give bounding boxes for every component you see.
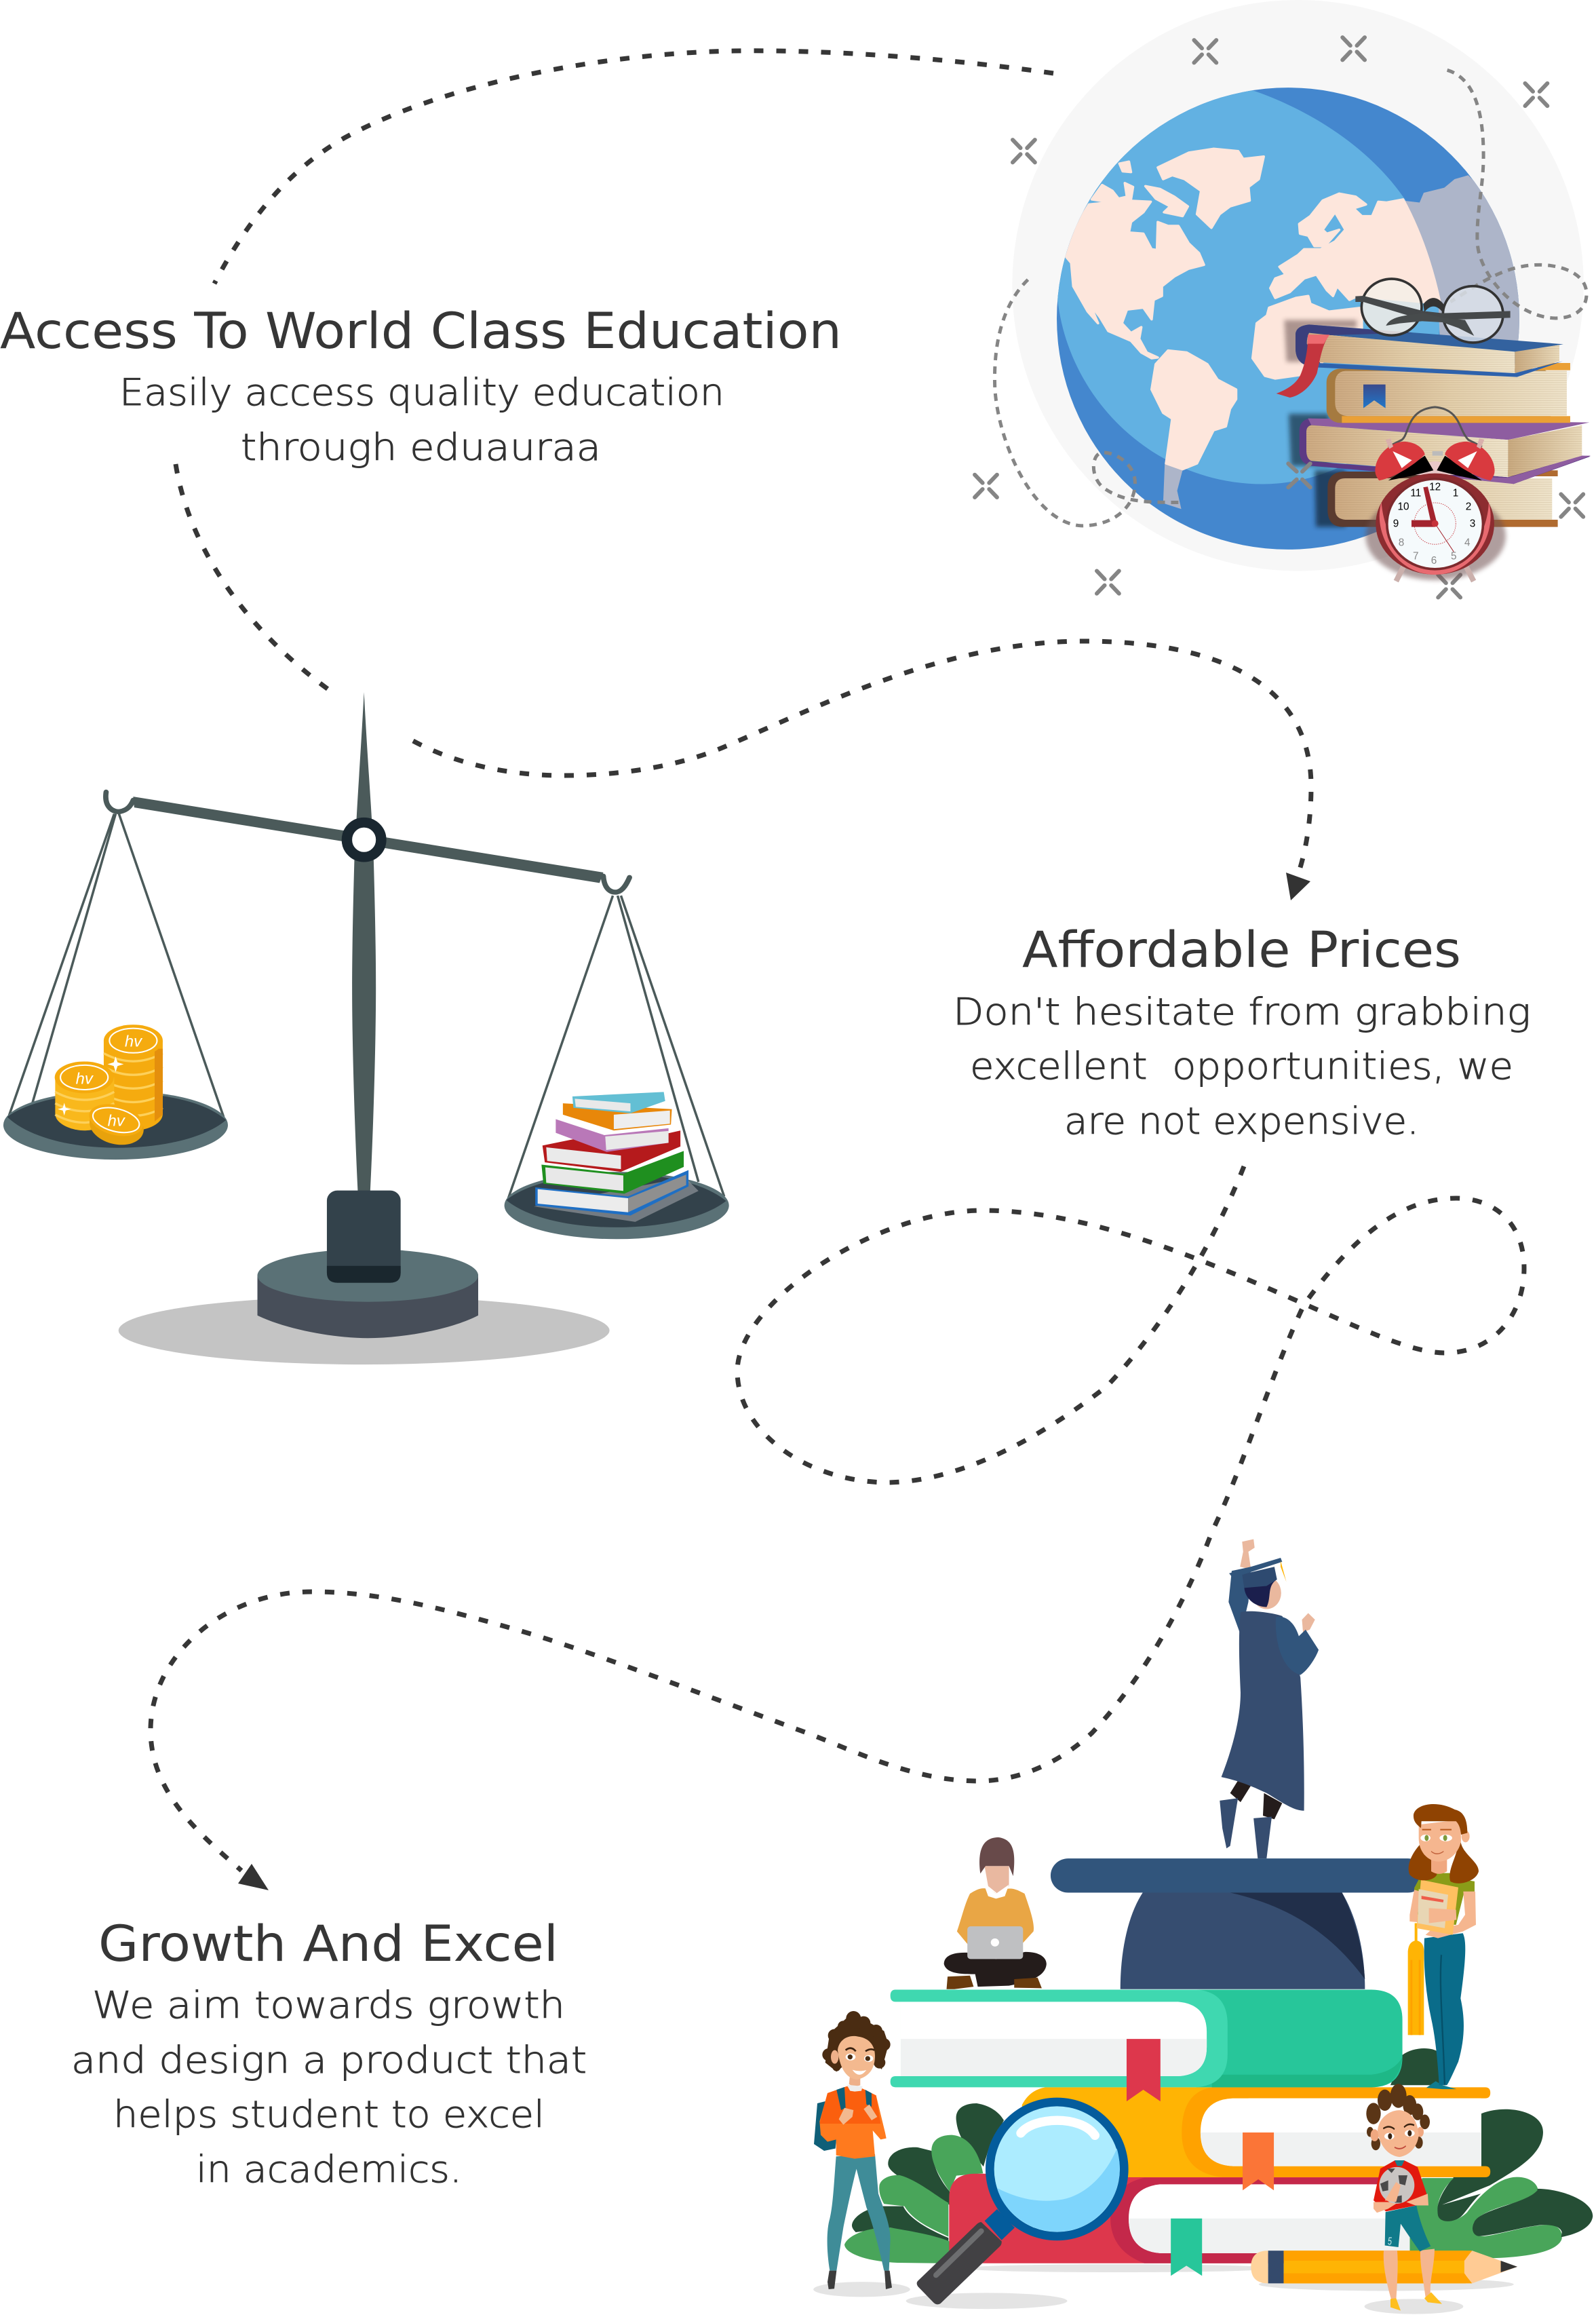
globe [1057, 88, 1519, 550]
pivot ring [347, 822, 381, 857]
heading: growth and excel: Growth And Excel [98, 1915, 558, 1973]
alarm clock: 7 [1413, 550, 1419, 562]
standing student with books and tassel [1408, 1804, 1479, 2089]
text block: growth and excel: We aim towards growth [92, 1984, 565, 2027]
heading: access: Access To World Class Education [0, 303, 842, 360]
base [258, 1249, 478, 1338]
text block: growth and excel [71, 1984, 587, 2191]
coins [55, 1025, 163, 1150]
left leaves [844, 2103, 1004, 2263]
small book stack [534, 1092, 699, 1222]
student with laptop [944, 1837, 1047, 1989]
book 2 [1327, 363, 1570, 423]
text block: affordable prices: excellent opportunities, we [970, 1045, 1513, 1088]
sparkle crosses [975, 37, 1583, 598]
text block: growth and excel: and design a product that [71, 2039, 587, 2082]
dashed route and arrow: infinity loop to growth and excel [151, 1166, 1524, 1890]
cross over books [1288, 463, 1310, 487]
student with soccer ball: 5 [1388, 2235, 1392, 2247]
student with backpack [814, 2011, 892, 2289]
right leaves [1390, 2048, 1593, 2258]
alarm clock: 6 [1431, 555, 1437, 567]
coins: hv [108, 1112, 125, 1129]
yellow book [1022, 2087, 1490, 2190]
dashed route and arrow: to affordable prices [413, 641, 1311, 900]
text block: affordable prices: Don't hesitate from grabbing [953, 991, 1531, 1033]
illustration: globe with dashed curves and crosses [975, 0, 1587, 598]
pencil [1251, 2251, 1517, 2283]
glasses [1355, 279, 1511, 343]
graduate student [1220, 1539, 1319, 1858]
student with soccer ball [1366, 2084, 1442, 2311]
left pan [3, 1090, 228, 1160]
beam [106, 792, 629, 892]
text block: growth and excel: helps student to excel [113, 2093, 545, 2136]
dashed route: to scale [176, 464, 331, 691]
illustration: book stack, glasses and alarm clock [1277, 279, 1591, 581]
strings [9, 814, 724, 1199]
text block: access: through eduauraa [241, 426, 601, 469]
post [352, 692, 376, 1192]
book 3 [1300, 418, 1591, 484]
post block [327, 1191, 401, 1283]
red book [949, 2174, 1409, 2276]
illustration: students on stacked books [813, 1539, 1593, 2314]
green book [891, 1990, 1403, 2101]
magnifying glass [917, 2098, 1129, 2304]
heading: affordable prices: Affordable Prices [1022, 921, 1461, 979]
coins: hv [76, 1070, 94, 1087]
dashed route: top arc [214, 51, 1053, 284]
alarm clock: 10 [1397, 501, 1409, 512]
alarm clock: 4 [1464, 537, 1471, 548]
alarm clock [1365, 407, 1506, 581]
book 1 with ribbon [1277, 324, 1563, 398]
text block: access [119, 371, 724, 469]
alarm clock: 9 [1393, 518, 1399, 530]
book shadows [1284, 320, 1357, 527]
globe backdrop circle [1012, 0, 1584, 571]
graduation cap [1051, 1858, 1425, 1989]
text block: affordable prices: are not expensive. [1064, 1100, 1419, 1143]
ground shadows [813, 2264, 1514, 2314]
text block: affordable prices [953, 991, 1531, 1143]
book 4 [1327, 470, 1558, 527]
text block: access: Easily access quality education [119, 371, 724, 414]
ground shadow [119, 1297, 610, 1364]
alarm clock: 8 [1399, 537, 1404, 548]
alarm clock: 5 [1451, 550, 1457, 562]
coins: hv [125, 1033, 142, 1050]
alarm clock: 11 [1410, 487, 1421, 499]
alarm clock: 12 [1429, 482, 1441, 493]
alarm clock: 2 [1466, 501, 1471, 512]
right pan [505, 1172, 729, 1239]
alarm clock: 1 [1453, 487, 1458, 499]
stacked books and cap [891, 1539, 1517, 2283]
thin dashed curves [994, 70, 1587, 526]
text block: growth and excel: in academics. [196, 2148, 462, 2191]
illustration: balance scale [3, 692, 729, 1364]
alarm clock: 3 [1470, 518, 1475, 530]
